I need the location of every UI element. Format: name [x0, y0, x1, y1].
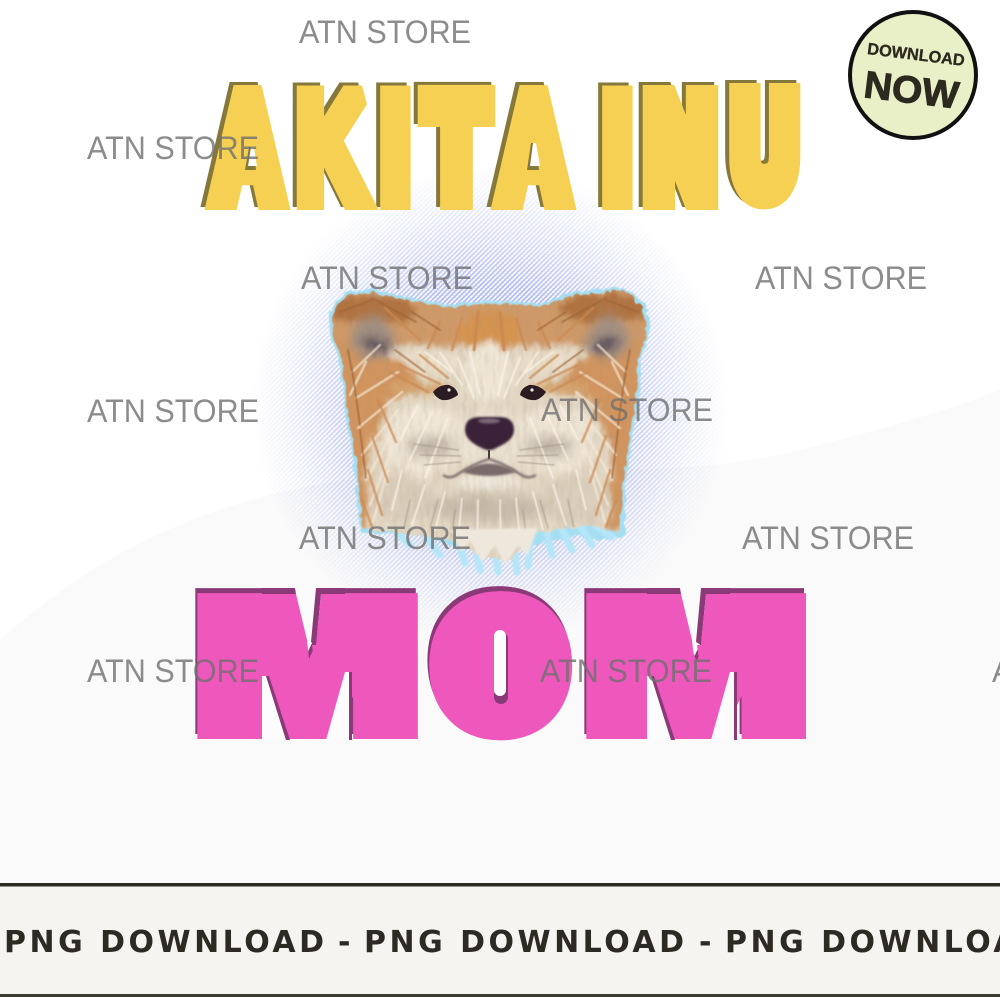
- banner: png download strip: -: [699, 925, 711, 960]
- heading face: [215, 65, 796, 231]
- icon: nose: [465, 417, 514, 459]
- heading shadow: U: [729, 67, 792, 220]
- heading shadow: A: [497, 67, 562, 224]
- icon: akita dog face: [320, 280, 660, 572]
- fur body: [331, 288, 648, 560]
- heading shadow: M: [581, 559, 807, 763]
- heading face: K: [297, 65, 365, 231]
- heading shadow: O: [445, 580, 553, 740]
- fur texture: [372, 303, 639, 558]
- letter A counters: [245, 143, 540, 170]
- icon: right eye: [520, 385, 546, 400]
- badge: download now: [850, 12, 976, 138]
- heading shadow: I: [599, 63, 628, 228]
- fur strands, left side: [340, 298, 504, 552]
- forehead blaze and brows: [464, 342, 512, 402]
- icon: left ear inner: [350, 314, 396, 359]
- banner: png download strip: -: [338, 925, 350, 960]
- icon: mouth: [443, 459, 536, 477]
- watermark: ATN STORE repeats: ATN STORE: [540, 653, 712, 689]
- watermark: ATN STORE repeats: ATN STORE: [299, 14, 471, 50]
- watermark: ATN STORE repeats: ATN STORE: [299, 520, 471, 556]
- badge: download now: NOW: [862, 64, 961, 118]
- fur strands, right side: [474, 298, 638, 552]
- heading shadow: A: [211, 67, 276, 224]
- M notch shaping, left letter: [262, 588, 352, 740]
- heading face: [194, 564, 809, 768]
- heading face: A: [501, 70, 566, 227]
- heading shadow: K: [293, 62, 361, 228]
- heading: MOM: [192, 559, 809, 768]
- chin fur tufts: [450, 528, 538, 565]
- heading face: U: [733, 70, 796, 223]
- watermark: ATN STORE repeats: ATN STORE: [87, 393, 259, 429]
- heading shadow: [192, 559, 807, 763]
- banner: png download strip: PNG DOWNLOAD: [364, 925, 684, 960]
- icon: left eye: [433, 385, 458, 400]
- heading shadow: I: [377, 63, 406, 228]
- heading face: O: [447, 585, 555, 745]
- heading shadow: M: [192, 559, 419, 763]
- orange crown and ears: [331, 289, 647, 353]
- O counter: [494, 630, 508, 704]
- heading shadow: T: [422, 64, 483, 225]
- halftone halo behind the dog: [267, 182, 713, 620]
- tan eye band: [390, 382, 450, 394]
- cheeks: [383, 406, 467, 474]
- heading face: M: [194, 564, 421, 768]
- watermark: ATN STORE repeats: ATN STORE: [87, 653, 259, 689]
- heading face: A: [215, 70, 280, 227]
- banner: png download strip: [0, 883, 1000, 997]
- watermark: ATN STORE repeats: ATN STORE: [87, 130, 259, 166]
- chin fringe tufts: [395, 522, 612, 572]
- M notch shaping, right letter: [647, 588, 737, 740]
- badge: download now: DOWNLOAD: [866, 40, 966, 70]
- heading shadow: N: [643, 68, 710, 222]
- orange head sides: [338, 343, 423, 530]
- heading: AKITA INU: [211, 62, 796, 231]
- watermark: ATN STORE repeats: [87, 14, 1000, 689]
- watermark: ATN STORE repeats: ATN STORE: [742, 520, 914, 556]
- muzzle: [464, 412, 515, 464]
- heading shadow: [211, 62, 792, 228]
- heading face: I: [603, 66, 632, 231]
- watermark: ATN STORE repeats: ATN STORE: [541, 392, 713, 428]
- watermark: ATN STORE repeats: ATN STORE: [301, 260, 473, 296]
- heading face: T: [426, 67, 487, 228]
- banner: png download strip: PNG DOWNLOAD: [4, 925, 324, 960]
- heading face: N: [647, 71, 714, 225]
- heading face: M: [583, 564, 809, 768]
- heading face: I: [381, 66, 410, 231]
- cyan outline glow: [329, 287, 650, 552]
- icon: right ear inner: [584, 314, 630, 359]
- watermark: ATN STORE repeats: ATN STORE: [755, 260, 927, 296]
